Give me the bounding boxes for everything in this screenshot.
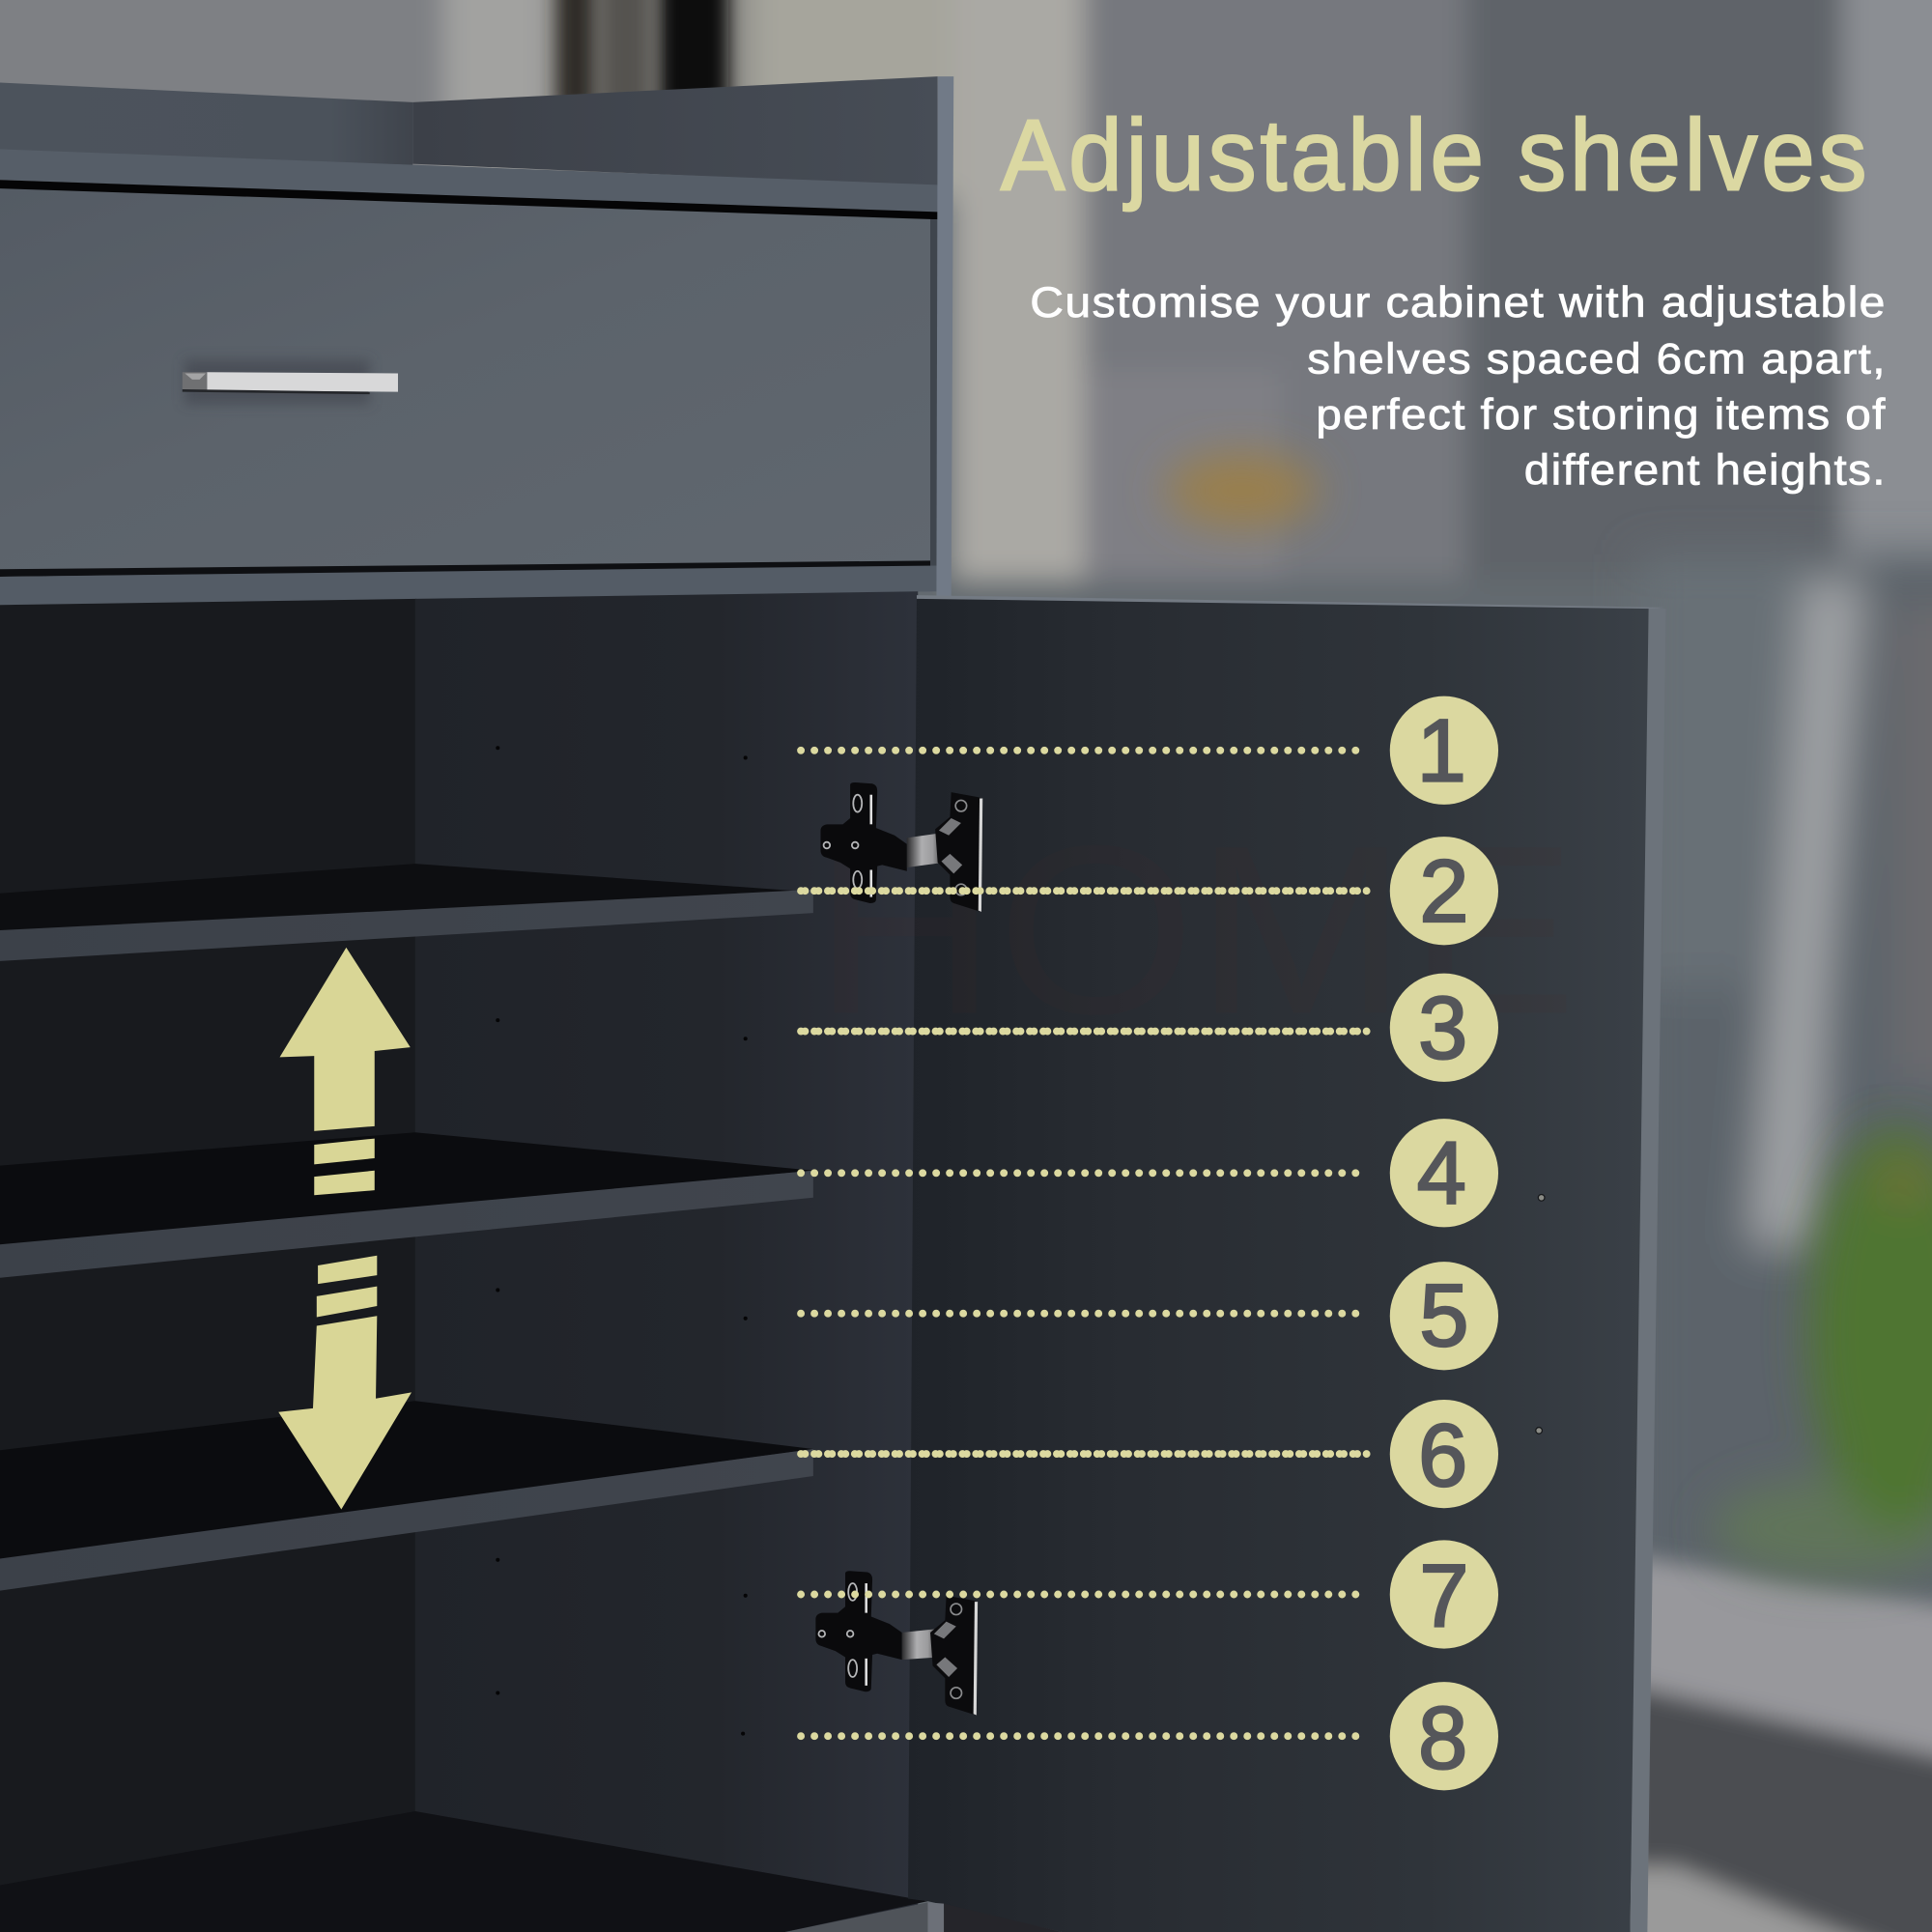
badge 3: 3 [1418, 980, 1467, 1078]
hinge bottom [815, 1571, 978, 1716]
dotted line 3 [801, 1029, 1367, 1035]
top back panels [0, 76, 938, 186]
description line 4: different heights. [1524, 446, 1887, 494]
shelf 2 [0, 1132, 813, 1278]
floor under door [944, 1904, 1062, 1932]
dotted line 4 [801, 1170, 1356, 1176]
open door [813, 595, 1665, 1932]
plant blur [1713, 1127, 1932, 1577]
top shelf board [0, 149, 938, 213]
light floor band [1627, 1555, 1932, 1770]
badge 7 [1390, 1540, 1498, 1649]
black gap [0, 180, 938, 220]
dotted line 6 [801, 1451, 1367, 1457]
dotted line 8 [801, 1733, 1356, 1739]
badge 1: 1 [1417, 702, 1466, 801]
badge 3 [1390, 974, 1498, 1082]
badge 2: 2 [1419, 842, 1468, 941]
down arrow [278, 1256, 412, 1509]
numbered badges [1390, 696, 1498, 1790]
door face [908, 596, 1651, 1932]
description line 2: shelves spaced 6cm apart, [1307, 335, 1887, 383]
left wall [0, 599, 416, 1932]
dark vase shapes [557, 0, 728, 111]
badge 5: 5 [1419, 1266, 1468, 1365]
dotted line 7 [801, 1591, 1356, 1598]
back wall [415, 591, 918, 1932]
cabinet interior [0, 591, 927, 1932]
description line 3: perfect for storing items of [1316, 391, 1887, 439]
badge 7: 7 [1419, 1548, 1468, 1646]
blurred wall right of door [1638, 554, 1932, 1602]
door screws [1536, 1194, 1545, 1434]
dotted line 2 [801, 888, 1367, 894]
hinge top [820, 782, 982, 912]
drawer front [0, 188, 933, 569]
dotted line 1 [801, 748, 1356, 753]
dark floor band [1627, 1685, 1932, 1932]
badge 6: 6 [1418, 1406, 1467, 1505]
dotted line 5 [801, 1311, 1356, 1317]
description [1030, 279, 1887, 494]
gold blur [1166, 453, 1319, 527]
cabinet side strip [936, 76, 953, 596]
badge 2 [1390, 837, 1498, 945]
drawer handle [183, 359, 398, 404]
description line 1: Customise your cabinet with adjustable [1030, 279, 1887, 327]
title: Adjustable shelves [1001, 99, 1870, 212]
bottom shelf [0, 1811, 927, 1932]
badge 6 [1390, 1400, 1498, 1508]
shelf 1 [0, 864, 813, 961]
light floor strip [1602, 1866, 1932, 1932]
door edge [1631, 608, 1665, 1932]
shelf 3 [0, 1401, 813, 1591]
peg holes [496, 746, 748, 1736]
lower rail [0, 565, 938, 605]
faint watermark: HOME [813, 795, 1577, 1064]
dotted shelf-position lines [801, 751, 1367, 1736]
badge 4 [1390, 1119, 1498, 1227]
badge 8 [1390, 1682, 1498, 1790]
cabinet post [927, 1902, 944, 1932]
badge 1 [1390, 696, 1498, 805]
badge 8: 8 [1418, 1689, 1467, 1787]
badge 4: 4 [1417, 1124, 1466, 1223]
up arrow [280, 948, 411, 1195]
cabinet upper section [0, 76, 953, 605]
badge 5 [1390, 1262, 1498, 1370]
